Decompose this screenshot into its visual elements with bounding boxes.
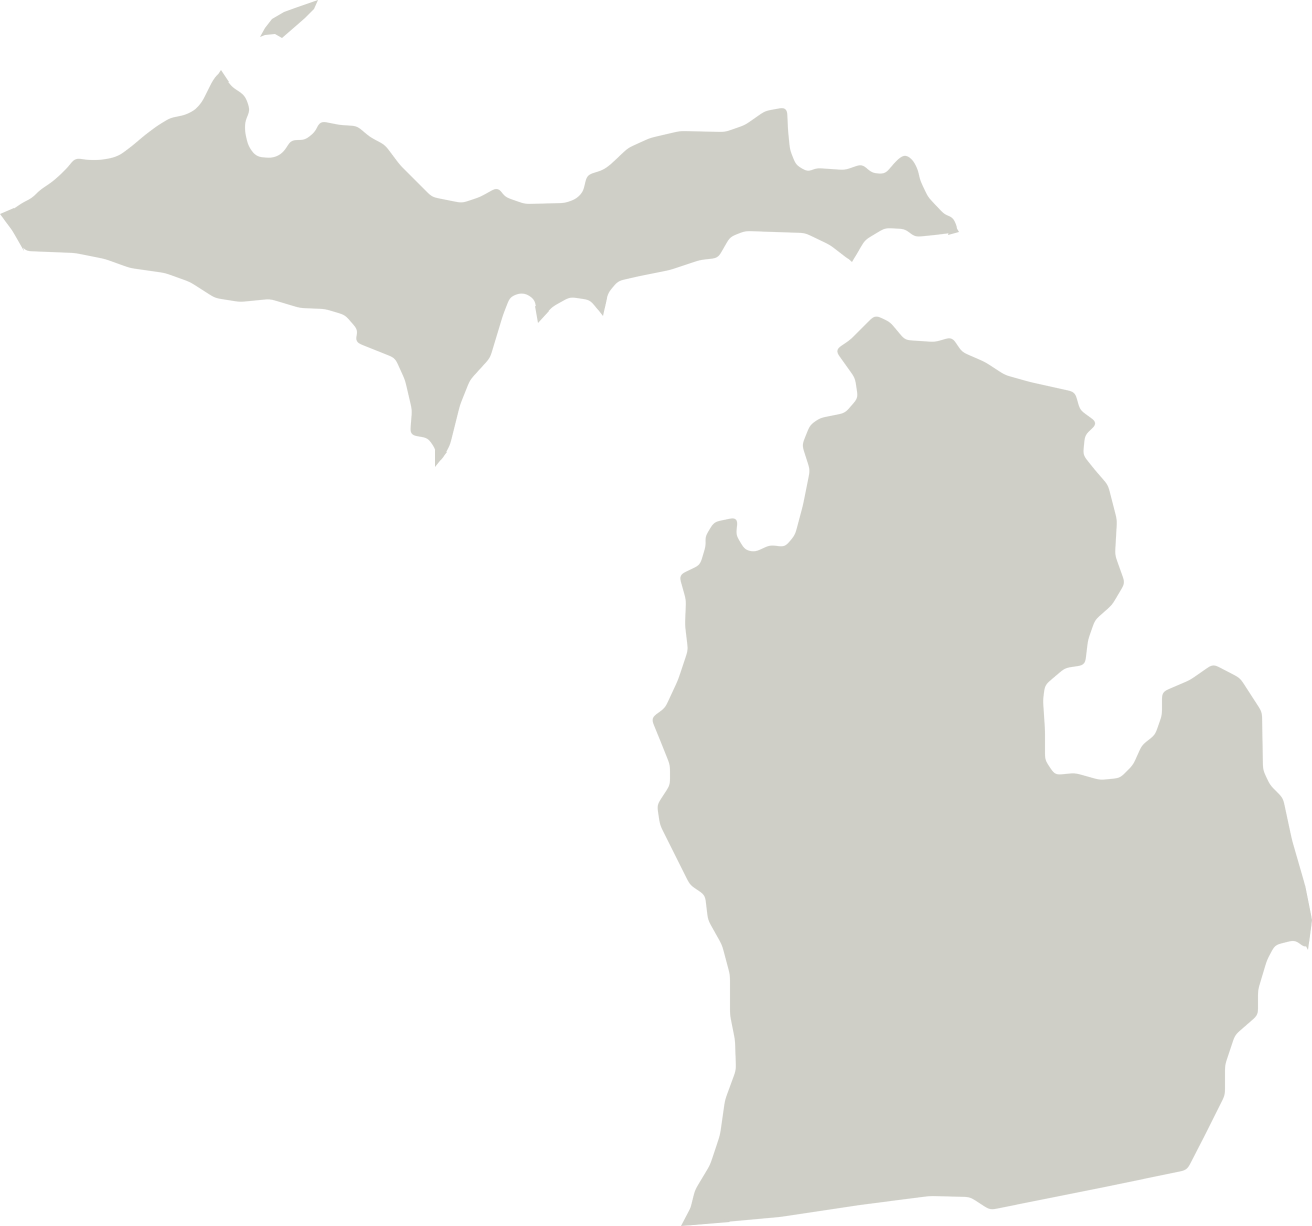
- region: Upper Peninsula: [0, 70, 959, 467]
- region: Lower Peninsula: [651, 315, 1312, 1226]
- region: Isle Royale: [260, 0, 318, 38]
